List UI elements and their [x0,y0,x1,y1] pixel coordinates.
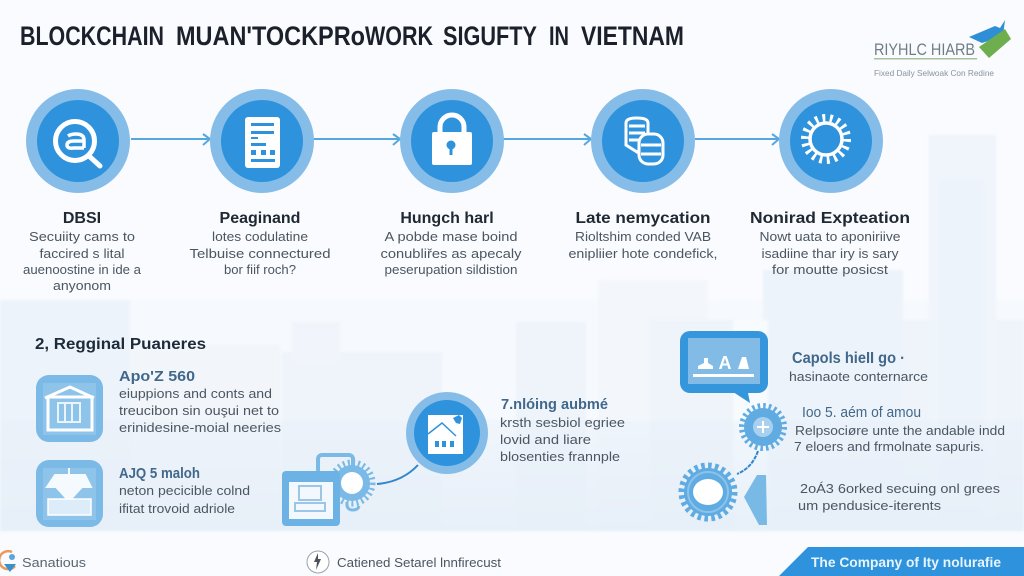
partner text 1: Apo'Z 560 [119,368,195,385]
title: WORK [365,21,433,51]
partner text 1: eiuppions and conts and [119,386,272,401]
icon: speech bubble: A [718,353,732,373]
right text 3: um pendusice-iterents [798,498,942,513]
center text: 7.nlóing aubmé [501,396,608,413]
step 4 text: Rioltshim conded VAB [575,229,711,244]
step 3 text: conubliřes as apecaly [380,246,522,261]
background skyline [0,135,1024,531]
step 1 text: anyonom [53,278,111,293]
right text 1: Capols hieII go · [792,350,905,367]
step 3 text: A pobde mase boind [384,229,518,244]
step 4 text [568,210,718,261]
partner text 2: neton pecicible colnd [119,483,250,498]
footer center [307,551,501,573]
footer left logo: Sanatious [22,555,87,570]
footer banner: The Company of Ity nolurafie [811,554,1001,570]
center text: lovid and liare [500,432,591,447]
logo top right: RIYHLC HIARB [874,40,975,59]
step 2 text: bor fiif roch? [224,262,296,277]
logo top right [874,20,1011,78]
step 5 text: Nowt uata to aponiriive [760,229,900,244]
step 1 text: faccired s lital [40,246,125,261]
icon: left pointer [744,475,767,525]
center text [500,396,625,464]
step 3 text: peserupation sildistion [384,262,518,277]
step 5 text: for moutte posicst [772,262,888,277]
icon: shield crest [36,460,103,527]
step 4 text: enipliier hote condefick, [568,246,718,261]
title: MUAN'TOCKPRo [176,21,365,51]
partner text 2: AJQ 5 maloh [119,465,200,482]
partner text 2: ifitat trovoid adriole [119,501,235,516]
connector [377,465,418,484]
step 1 text: Secuiity cams to [29,229,135,244]
right text 1: hasinaote conternarce [789,369,928,384]
right text 2: Relpsociøre unte the andable indd [795,423,1005,438]
step 2 text: Telbuise connectured [190,246,330,261]
step 1 text [23,210,142,293]
right text 1 [789,350,928,384]
section heading: 2, Regginal Puaneres [35,336,206,353]
icon: large gear [682,466,734,518]
right text 2: 7 eloers and frmolnate sapuris. [794,439,984,454]
center text: krsth sesbiol egriee [500,415,625,430]
partner text 1: erinidesine-moial neeries [119,420,282,435]
arrows between steps [131,134,779,145]
title: SIGUFTY [443,21,537,51]
partner text 2 [119,465,250,516]
step 1 text: auenoostine in ide a [23,262,142,277]
icon: toolbox and gear [282,455,372,526]
connector [737,451,758,474]
icon: speech bubble [680,331,768,403]
step 3 text: Hungch harl [400,210,494,227]
step 2 text [190,210,330,277]
partner text 1: treucibon sin ouşui net to [119,403,279,418]
footer center: Catiened Setarel lnnfirecust [337,555,501,570]
step 5 text: Nonirad Expteation [750,210,910,227]
logo top right: Fixed Daily Selwoak Con Redine [874,68,994,78]
footer left logo [0,551,87,572]
title [20,21,684,51]
step 4 text: Late nemycation [576,210,710,227]
step 1 icon: search [26,89,130,193]
icon: small gear [742,406,784,448]
step 3 text [380,210,522,277]
title: BLOCKCHAIN [20,21,164,51]
step 3 icon: padlock [400,89,504,193]
step 2 text: Peaginand [220,210,300,227]
step 2 text: lotes codulatine [212,229,308,244]
footer banner [779,547,1024,576]
step 5 text: isadiine thar iry is sary [762,246,899,261]
right text 2 [794,404,1005,454]
step 1 text: DBSI [63,210,101,227]
icon: bank [36,375,103,442]
step 5 icon: gear sun [779,89,883,193]
right text 3 [798,481,1001,513]
icon: house in circle [406,392,488,474]
center text: blosenties frannple [500,449,620,464]
partner text 1 [119,368,282,435]
title: VIETNAM [581,21,684,51]
step 2 icon: document [210,89,314,193]
step 4 icon: coins [591,89,695,193]
right text 2: Ioo 5. aém of amou [802,404,921,421]
right text 3: 2oÁ3 6orked secuing onl grees [800,481,1001,496]
title: IN [549,21,569,51]
step 5 text [750,210,910,277]
